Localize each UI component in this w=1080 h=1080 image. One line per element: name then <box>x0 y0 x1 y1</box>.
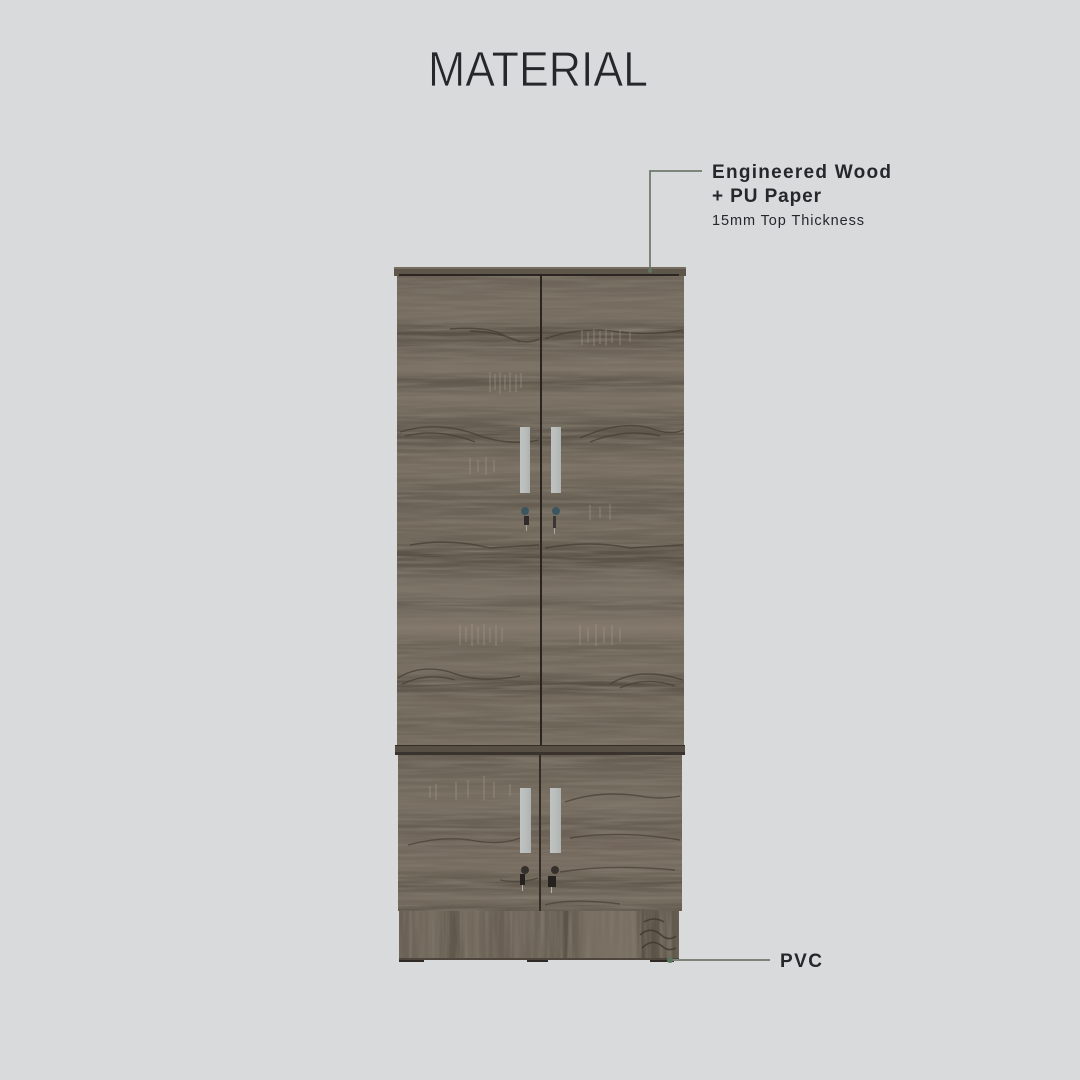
callout: engineered wood text: + PU Paper <box>712 186 822 207</box>
middle shelf <box>395 745 685 755</box>
upper left key <box>521 507 529 531</box>
upper left door <box>397 276 540 745</box>
lower door gap <box>539 755 541 911</box>
upper right handle <box>551 427 561 493</box>
upper left handle <box>520 427 530 493</box>
callout: engineered wood leader line <box>648 171 702 273</box>
plinth <box>399 911 679 960</box>
lower right key <box>548 866 559 893</box>
upper door gap <box>540 274 542 745</box>
upper right door <box>542 276 684 745</box>
title: MATERIAL <box>428 43 648 97</box>
lower right handle <box>550 788 561 853</box>
callout: PVC label: PVC <box>780 951 822 972</box>
upper right key <box>552 507 560 534</box>
lower right door <box>541 755 682 911</box>
callout: engineered wood text <box>712 162 891 229</box>
top panel <box>394 267 686 276</box>
callout: PVC leader line <box>667 957 770 963</box>
wardrobe illustration <box>394 267 686 962</box>
lower left door <box>398 755 539 911</box>
callout: engineered wood text: Engineered Wood <box>712 162 891 183</box>
lower left handle <box>520 788 531 853</box>
callout: engineered wood text: 15mm Top Thickness <box>712 213 864 229</box>
feet <box>399 960 674 962</box>
lower left key <box>520 866 529 891</box>
